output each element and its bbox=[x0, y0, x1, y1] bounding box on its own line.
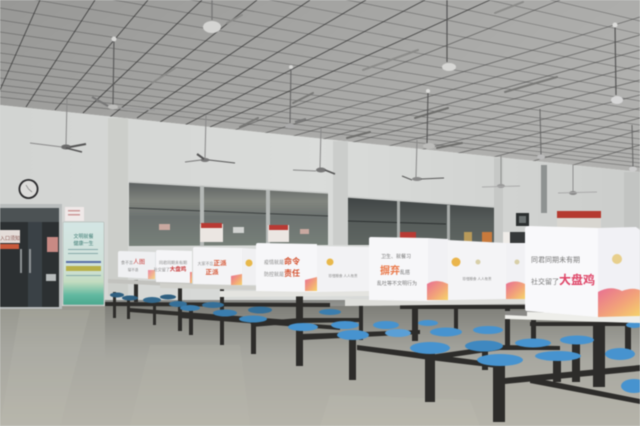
fan bbox=[442, 0, 456, 71]
fan bbox=[402, 140, 444, 181]
fan bbox=[629, 125, 637, 172]
divider: big dish sign left: 社交留了大盘鸡 bbox=[154, 265, 187, 273]
table frames and beams bbox=[105, 280, 640, 422]
wall pillars bbox=[108, 118, 640, 296]
divider: order and responsibility sign: 珍惜粮食 人人有责 bbox=[329, 273, 358, 278]
floor bbox=[0, 300, 640, 426]
divider: big dish sign left bbox=[154, 250, 192, 283]
fan bbox=[423, 89, 435, 149]
standing poster: 文明就餐 bbox=[73, 233, 94, 240]
divider: hygiene sign: 摒弃乱搭 bbox=[380, 264, 410, 277]
divider: big dish sign front: 社交留了大盘鸡 bbox=[531, 272, 595, 287]
fan bbox=[185, 115, 235, 163]
standing poster bbox=[63, 222, 104, 305]
divider: order and responsibility sign: 疫情就是命令 bbox=[264, 256, 300, 266]
divider: order and responsibility sign: 防控就是责任 bbox=[264, 268, 300, 278]
divider: big dish sign left: 同君同期未有期 bbox=[159, 259, 187, 265]
divider: hygiene sign: 乱吐等不文明行为 bbox=[377, 280, 417, 287]
fan bbox=[92, 36, 155, 110]
ceiling bbox=[0, 0, 640, 172]
ceiling light strips bbox=[152, 2, 557, 148]
divider: integrity sign bbox=[193, 247, 256, 285]
wall signs bbox=[503, 211, 601, 244]
fan bbox=[30, 99, 86, 152]
service window right bbox=[348, 197, 494, 245]
fan bbox=[611, 22, 623, 104]
fan bbox=[482, 155, 520, 188]
divider: hygiene sign: 卫生、就餐习 bbox=[381, 253, 411, 260]
notice on wall bbox=[65, 207, 84, 221]
blue stools bbox=[110, 292, 640, 393]
entrance door: 入口须知 bbox=[0, 235, 20, 242]
fan bbox=[203, 0, 221, 33]
ceiling fans bbox=[30, 0, 637, 195]
service window left bbox=[129, 182, 328, 246]
fan bbox=[293, 129, 335, 174]
divider: far left sign bbox=[118, 251, 159, 280]
divider: integrity sign: 大家不忘正派 bbox=[198, 259, 227, 267]
table tops bbox=[108, 279, 640, 323]
wall clock bbox=[18, 179, 38, 199]
divider: big dish sign front: 同君同期未有期 bbox=[531, 255, 580, 264]
divider: hygiene sign: 珍惜粮食 人人有责 bbox=[463, 276, 492, 281]
fan bbox=[537, 109, 545, 160]
divider: big dish sign front bbox=[525, 226, 640, 317]
back wall bbox=[0, 105, 640, 310]
divider: integrity sign: 正派 bbox=[206, 268, 219, 276]
entrance door bbox=[0, 204, 62, 309]
divider: far left sign: 食不言人图 bbox=[121, 259, 145, 266]
divider: order and responsibility sign bbox=[256, 243, 369, 292]
fan bbox=[558, 165, 597, 195]
standing poster: 健康一生 bbox=[73, 240, 94, 247]
fan bbox=[285, 65, 306, 128]
divider: hygiene sign bbox=[369, 237, 525, 301]
divider: far left sign: 寝不语 bbox=[128, 267, 139, 272]
